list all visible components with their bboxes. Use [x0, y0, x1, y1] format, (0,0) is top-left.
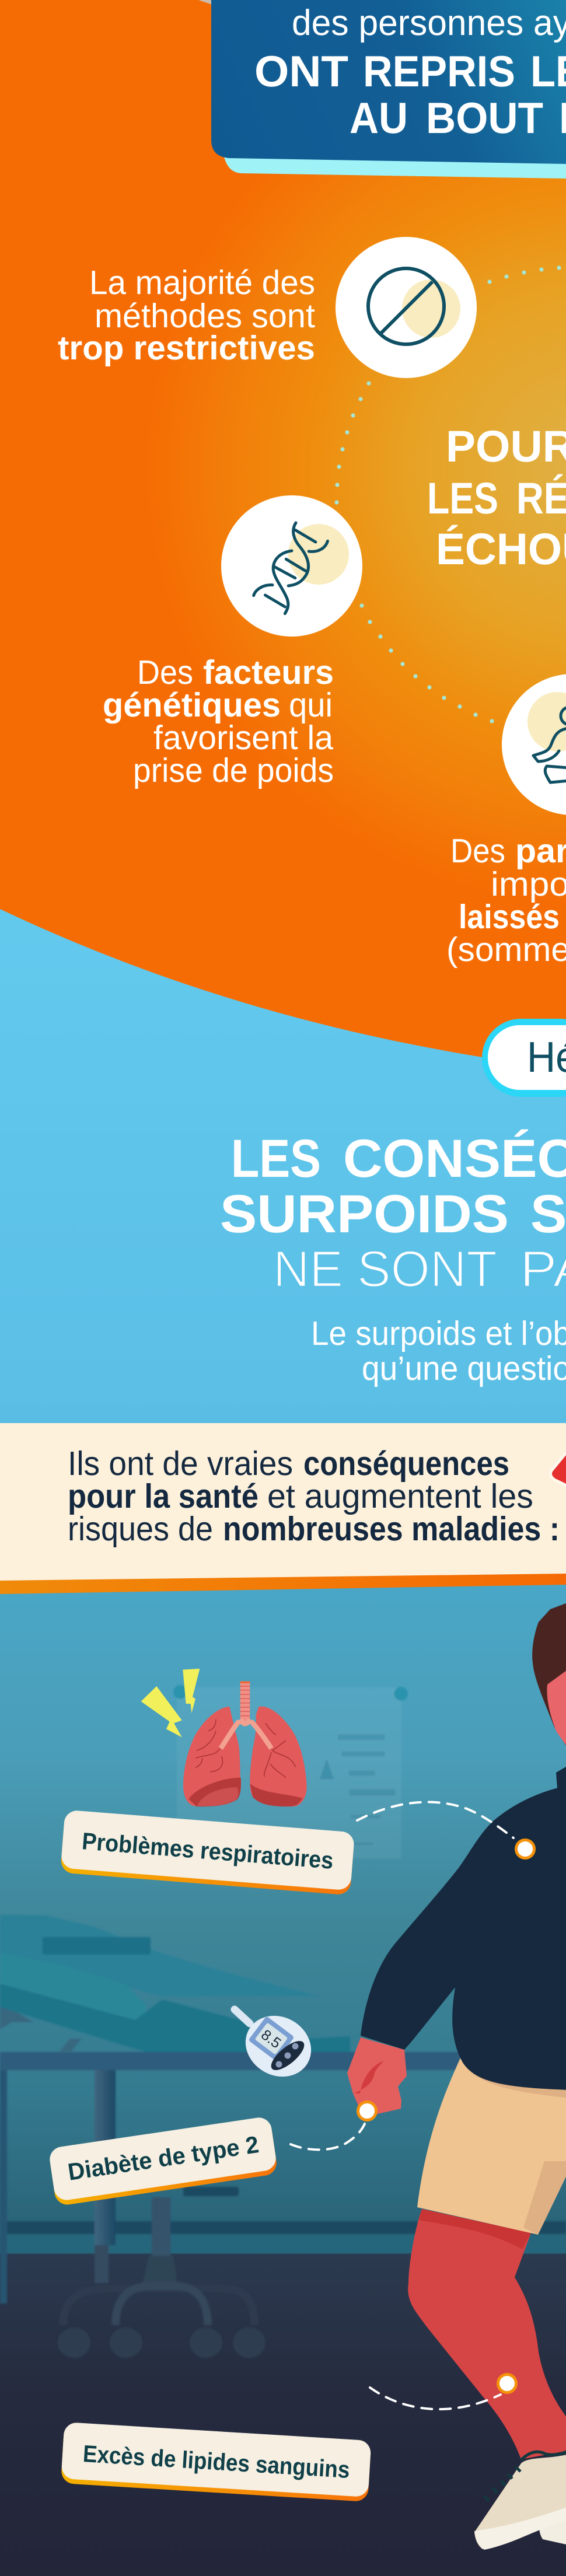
illustration: lungs and bolts	[141, 1669, 307, 1806]
hair	[532, 1602, 566, 1750]
connector: lungs to chest	[357, 1802, 534, 1858]
connector: diabetes to hand	[291, 2102, 376, 2149]
callout: statistic box	[211, 0, 566, 179]
heading: consequences of overweight: NE SONT	[273, 1240, 497, 1298]
heading: why diets fail: LES	[427, 474, 498, 523]
icon: meditating person	[502, 674, 566, 815]
hand	[347, 2037, 407, 2114]
heading: consequences of overweight: CONSÉC	[343, 1129, 566, 1189]
text: genetic factors: génétiques	[103, 686, 281, 724]
thumb shade	[354, 2061, 384, 2093]
text: neglected parameters: (somme	[446, 931, 566, 969]
banner orange edge	[0, 1570, 566, 1594]
sweater	[361, 1785, 566, 2090]
collar	[556, 1765, 566, 1788]
label: respiratory problems: Problèmes respiratoires	[81, 1827, 334, 1874]
statistic text: BOUT	[426, 93, 543, 142]
bronchi veins	[195, 1719, 296, 1778]
text: restrictive methods: méthodes sont	[95, 297, 315, 335]
label: type 2 diabetes	[48, 2116, 278, 2206]
yellow bolts	[141, 1669, 200, 1737]
banner text: et augmentent les	[267, 1477, 533, 1515]
label: excess blood lipids: Excès de lipides sanguins	[82, 2440, 351, 2483]
text: restrictive methods	[58, 264, 315, 367]
lung shaded bases	[188, 1778, 302, 1806]
decorative corner behind stat box	[198, 0, 212, 5]
text: genetic factors: facteurs	[203, 653, 334, 691]
text: genetic factors: favorisent la	[153, 719, 334, 757]
text: restrictive methods: La majorité des	[89, 264, 315, 302]
back shoe	[539, 2512, 566, 2545]
text: neglected parameters	[446, 832, 566, 969]
text: intro sentence	[311, 1315, 566, 1387]
heading: consequences of overweight: SURPOIDS	[220, 1184, 509, 1244]
text: restrictive methods: trop restrictives	[58, 329, 315, 367]
statistic text	[254, 3, 566, 142]
banner text: Ils ont de vraies	[68, 1445, 293, 1483]
statistic text: REPRIS	[363, 47, 515, 96]
icon: restriction sign	[336, 237, 477, 378]
label: excess blood lipids	[61, 2422, 371, 2502]
banner text: pour la santé	[68, 1477, 258, 1515]
panel: wall board	[173, 1685, 408, 1858]
banner text: risques de	[68, 1510, 213, 1548]
text: genetic factors: qui	[289, 686, 333, 724]
background: wall gradient	[0, 875, 566, 2258]
trachea	[221, 1682, 271, 1749]
face	[547, 1669, 566, 1749]
shorts	[417, 2057, 566, 2235]
red leg	[408, 2209, 566, 2459]
shoe laces and collar	[484, 2451, 566, 2501]
icon: red alert triangle	[550, 1449, 566, 1487]
banner text	[68, 1445, 560, 1548]
banner body	[0, 1423, 566, 1581]
marker: hand	[358, 2102, 376, 2120]
leg shaded band	[418, 2209, 531, 2249]
dotted connectors between reasons	[334, 265, 561, 723]
marker: chest	[516, 1840, 534, 1858]
heading: why diets fail	[427, 422, 566, 574]
marker: leg	[498, 2375, 516, 2392]
panel: orange section background	[0, 0, 566, 1069]
text: genetic factors: prise de poids	[133, 752, 334, 789]
section pill	[482, 1019, 566, 1097]
box body	[211, 0, 566, 164]
illustration: person	[347, 1602, 566, 2550]
left lung	[183, 1707, 240, 1806]
text: neglected parameters: impo	[491, 865, 566, 903]
statistic text: AU	[350, 93, 408, 142]
shoe sole	[474, 2507, 566, 2550]
shorts shadows	[467, 2060, 566, 2235]
heading: consequences of overweight: LES	[231, 1129, 321, 1189]
connector: lipids to leg	[370, 2375, 516, 2409]
heading: consequences of overweight	[220, 1129, 566, 1298]
front shoe	[474, 2454, 566, 2549]
label: respiratory problems	[60, 1810, 355, 1895]
panel: floor	[0, 2253, 566, 2576]
text: genetic factors	[103, 653, 334, 789]
text: genetic factors: Des	[137, 653, 193, 691]
panel: cream banner	[0, 1423, 566, 1594]
icon: glucose meter: 8.5	[258, 2026, 284, 2051]
banner text: conséquences	[303, 1445, 509, 1483]
icon: glucose meter	[235, 2004, 322, 2088]
text: neglected parameters: Des	[450, 832, 505, 870]
panel: examination table	[0, 1915, 566, 2304]
label: type 2 diabetes: Diabète de type 2	[66, 2131, 260, 2186]
panel: stool	[58, 2187, 265, 2358]
statistic text: ONT	[254, 47, 348, 96]
box lower cyan edge	[223, 155, 566, 179]
icon: DNA helix	[221, 495, 362, 637]
right lung	[250, 1707, 307, 1806]
